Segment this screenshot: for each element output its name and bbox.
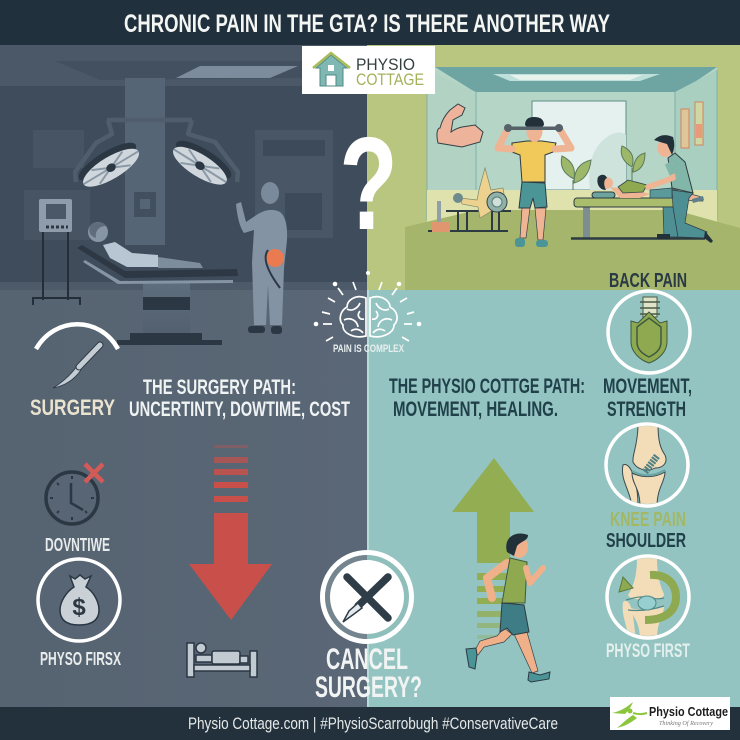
label: shoulder: SHOULDER — [606, 530, 686, 552]
illustration: physio room — [428, 102, 713, 247]
heart monitor — [33, 199, 80, 305]
footer text: Physio Cottage.com | #PhysioScarrobugh #ConservativeCare — [188, 714, 558, 733]
heading: the physio path — [389, 375, 585, 421]
posters — [681, 102, 703, 148]
label: physio first, left: PHYSO FIRSX — [40, 649, 121, 669]
icon: brain, pain is complex — [314, 271, 421, 355]
operating table — [77, 245, 238, 345]
surgical lamp right — [167, 134, 236, 192]
question: cancel surgery: CANCEL — [326, 643, 408, 676]
panel: surgery scene background — [0, 45, 367, 290]
logo: Physio Cottage bottom: Thinking Of Recovery — [659, 720, 713, 727]
illustration: operating room — [33, 78, 287, 345]
treatment table — [571, 198, 705, 238]
arrow: red down — [189, 445, 272, 620]
big question mark: ? — [339, 111, 398, 258]
icon: hospital bed — [187, 643, 257, 677]
panel: surgery path lower background — [0, 290, 367, 707]
surgical lamp arms — [75, 120, 238, 182]
icon: cancel surgery — [322, 552, 412, 642]
label: knee pain: KNEE PAIN — [610, 509, 686, 531]
icon: flexed bicep — [437, 104, 483, 147]
logo: Physio Cottage top: COTTAGE — [356, 70, 424, 89]
logo: Physio Cottage top: PHYSIO — [356, 55, 415, 74]
column — [125, 78, 165, 245]
standing man with bar — [498, 117, 571, 247]
figure: runner — [466, 534, 550, 682]
therapist and patient — [592, 135, 713, 243]
header bar — [0, 0, 740, 45]
footer bar — [0, 707, 740, 740]
label: movement, strength: STRENGTH — [607, 398, 686, 421]
arrow: green up — [452, 458, 534, 639]
leaves — [561, 146, 645, 190]
label: physio first, right: PHYSO FIRST — [606, 641, 690, 662]
icon: brain, pain is complex: PAIN IS COMPLEX — [333, 343, 404, 355]
label: movement, strength: MOVEMENT, — [603, 375, 692, 398]
icon: joint with rotation arrow — [607, 556, 689, 640]
label: surgery: SURGERY — [30, 395, 115, 420]
label: downtime: DOVNTIWE — [45, 535, 110, 555]
panel: physio scene background — [367, 45, 740, 290]
heading: the physio path: THE PHYSIO COTTGE PATH: — [389, 375, 585, 398]
divider strip — [367, 290, 369, 707]
question: cancel surgery — [315, 643, 422, 704]
icon: surgery arc and scalpel — [36, 324, 118, 388]
heading: the physio path: MOVEMENT, HEALING. — [393, 398, 558, 421]
label: movement, strength — [603, 375, 692, 421]
label: back pain: BACK PAIN — [609, 270, 687, 292]
logo: Physio Cottage bottom — [610, 697, 730, 730]
heading: the surgery path: THE SURGERY PATH: — [143, 376, 296, 399]
surgical lamp left — [74, 136, 145, 194]
icon: money bag in circle: $ — [72, 594, 86, 621]
heading: the surgery path — [129, 376, 350, 421]
panel: physio path lower background — [367, 290, 740, 707]
icon: spine and shield — [608, 291, 690, 373]
question: cancel surgery: SURGERY? — [315, 671, 422, 704]
logo: Physio Cottage top — [302, 46, 435, 94]
surgeon — [236, 182, 287, 334]
patient — [88, 222, 203, 268]
exercise bench with dumbbell — [428, 168, 511, 232]
icon: clock with red x — [46, 464, 103, 524]
icon: money bag in circle — [38, 559, 120, 641]
icon: knee joint — [606, 424, 688, 506]
heading: the surgery path: UNCERTINTY, DOWTIME, COST — [129, 398, 350, 421]
